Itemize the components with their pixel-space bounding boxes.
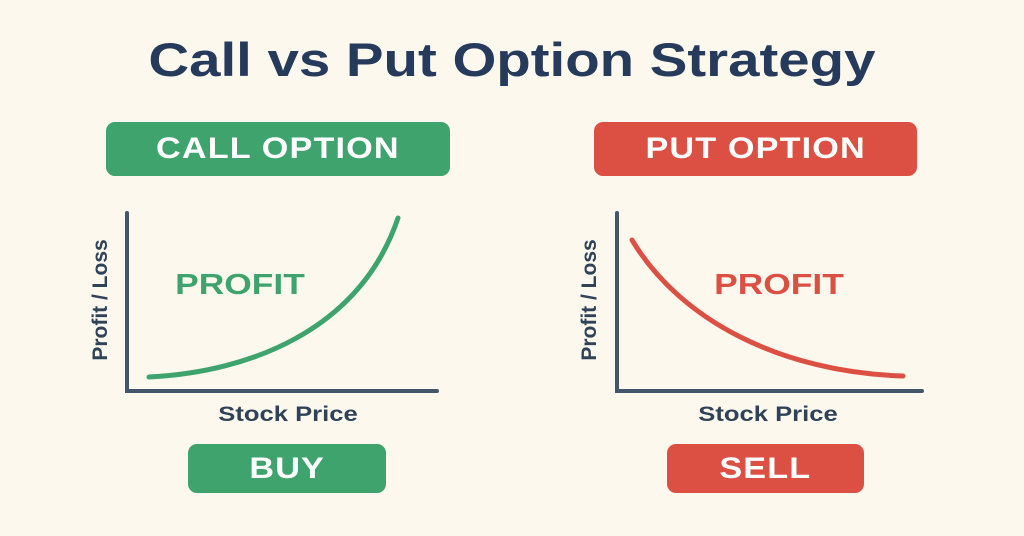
buy button: BUY: [249, 452, 325, 484]
chart: call: PROFIT: [175, 268, 305, 300]
chart: put: PROFIT: [714, 268, 844, 300]
chart: put: [578, 213, 922, 425]
chart: put: Stock Price: [698, 402, 838, 425]
buy button: [188, 444, 386, 493]
sell button: [667, 444, 864, 493]
chart: call: Stock Price: [218, 402, 358, 425]
call option header: [106, 122, 450, 176]
chart: call: [89, 213, 437, 425]
put option header: PUT OPTION: [645, 132, 866, 165]
title: Call vs Put Option Strategy: [148, 33, 876, 86]
call option header: CALL OPTION: [156, 132, 400, 165]
put option header: [594, 122, 917, 176]
chart: put: Profit / Loss: [578, 239, 601, 361]
sell button: SELL: [720, 452, 811, 484]
chart: call: Profit / Loss: [89, 239, 112, 361]
